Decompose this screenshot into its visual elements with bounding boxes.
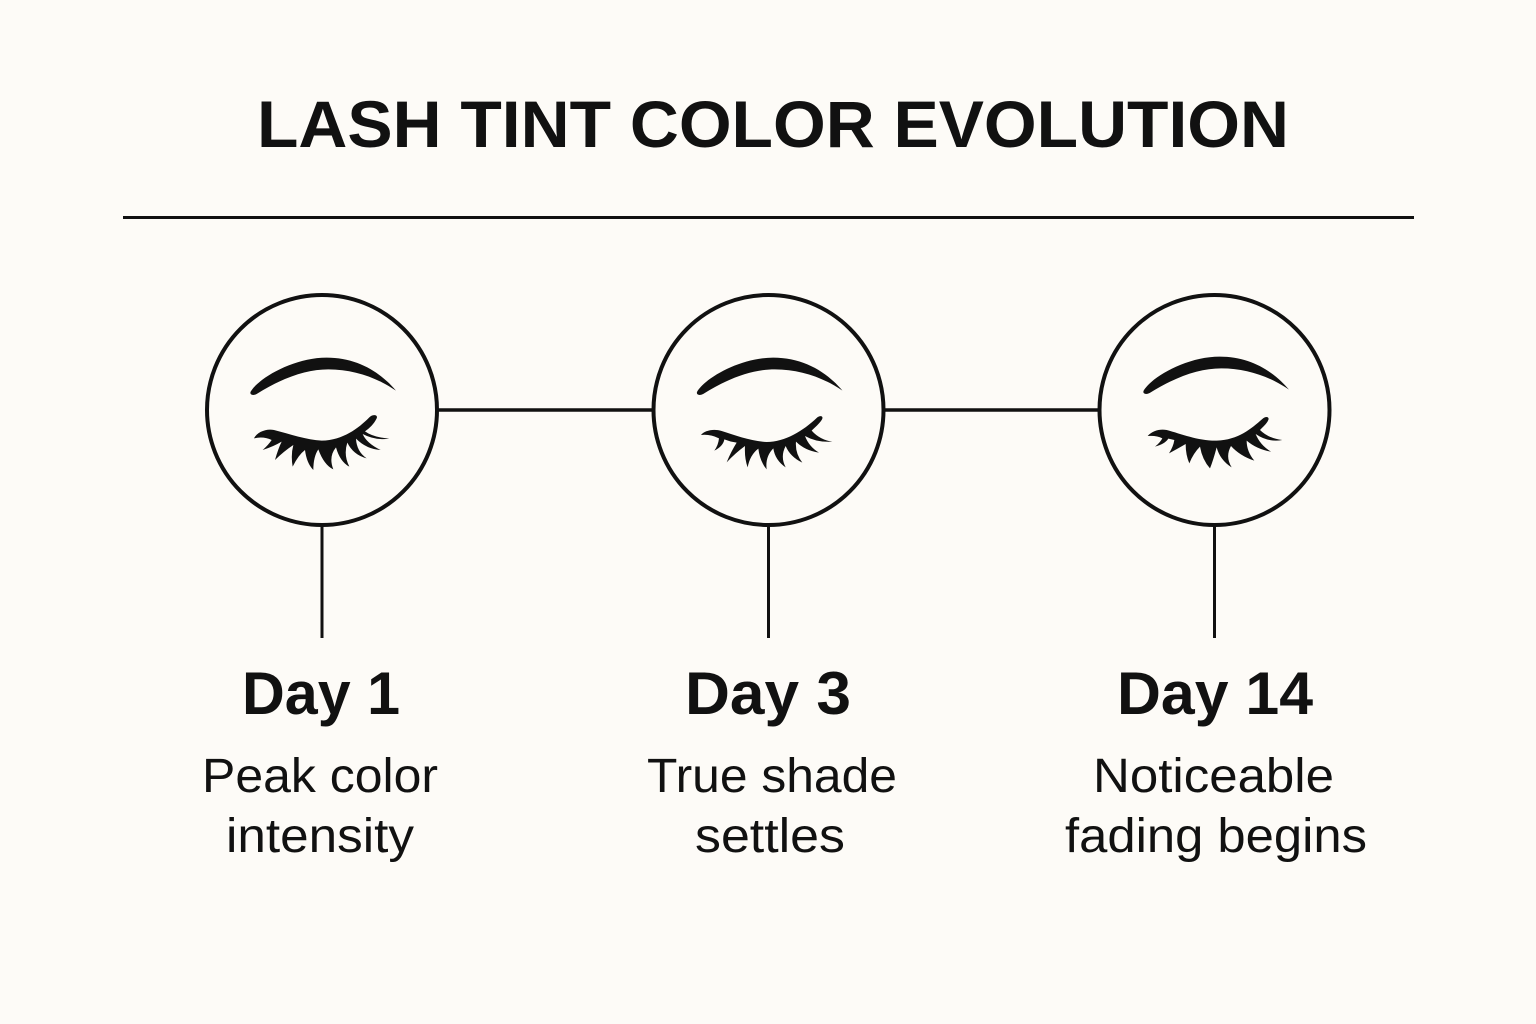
description: Day 3: settles: [695, 810, 845, 863]
icon: eye circle day 3: [654, 295, 884, 525]
stage: Day 3: [647, 295, 897, 863]
title: LASH TINT COLOR EVOLUTION: [257, 87, 1289, 161]
description: Day 1: intensity: [226, 810, 414, 863]
connector: Day 3 stem: [767, 525, 770, 638]
connector: Day 1 stem: [320, 525, 324, 638]
label: Day 1: Day 1: [242, 660, 400, 727]
description: Day 14: Noticeable: [1093, 750, 1334, 803]
icon: eye circle day 1: [207, 295, 437, 525]
label: Day 14: Day 14: [1117, 660, 1314, 727]
description: Day 3: [647, 750, 897, 863]
description: Day 14: fading begins: [1065, 810, 1367, 863]
icon: eye circle day 14: [1100, 295, 1330, 525]
icon: closed eye day 1: [250, 358, 396, 470]
timeline connectors: [437, 408, 1099, 412]
icon: closed eye day 3: [697, 358, 842, 469]
connector: Day 14 stem: [1213, 525, 1216, 638]
stage: Day 14: [1065, 295, 1367, 863]
description: Day 1: Peak color: [202, 750, 438, 803]
description: Day 3: True shade: [647, 750, 897, 803]
stage: Day 1: [202, 295, 438, 863]
title divider: [123, 216, 1414, 219]
label: Day 3: Day 3: [685, 660, 851, 727]
description: Day 14: [1065, 750, 1367, 863]
description: Day 1: [202, 750, 438, 863]
icon: closed eye day 14: [1143, 357, 1289, 468]
